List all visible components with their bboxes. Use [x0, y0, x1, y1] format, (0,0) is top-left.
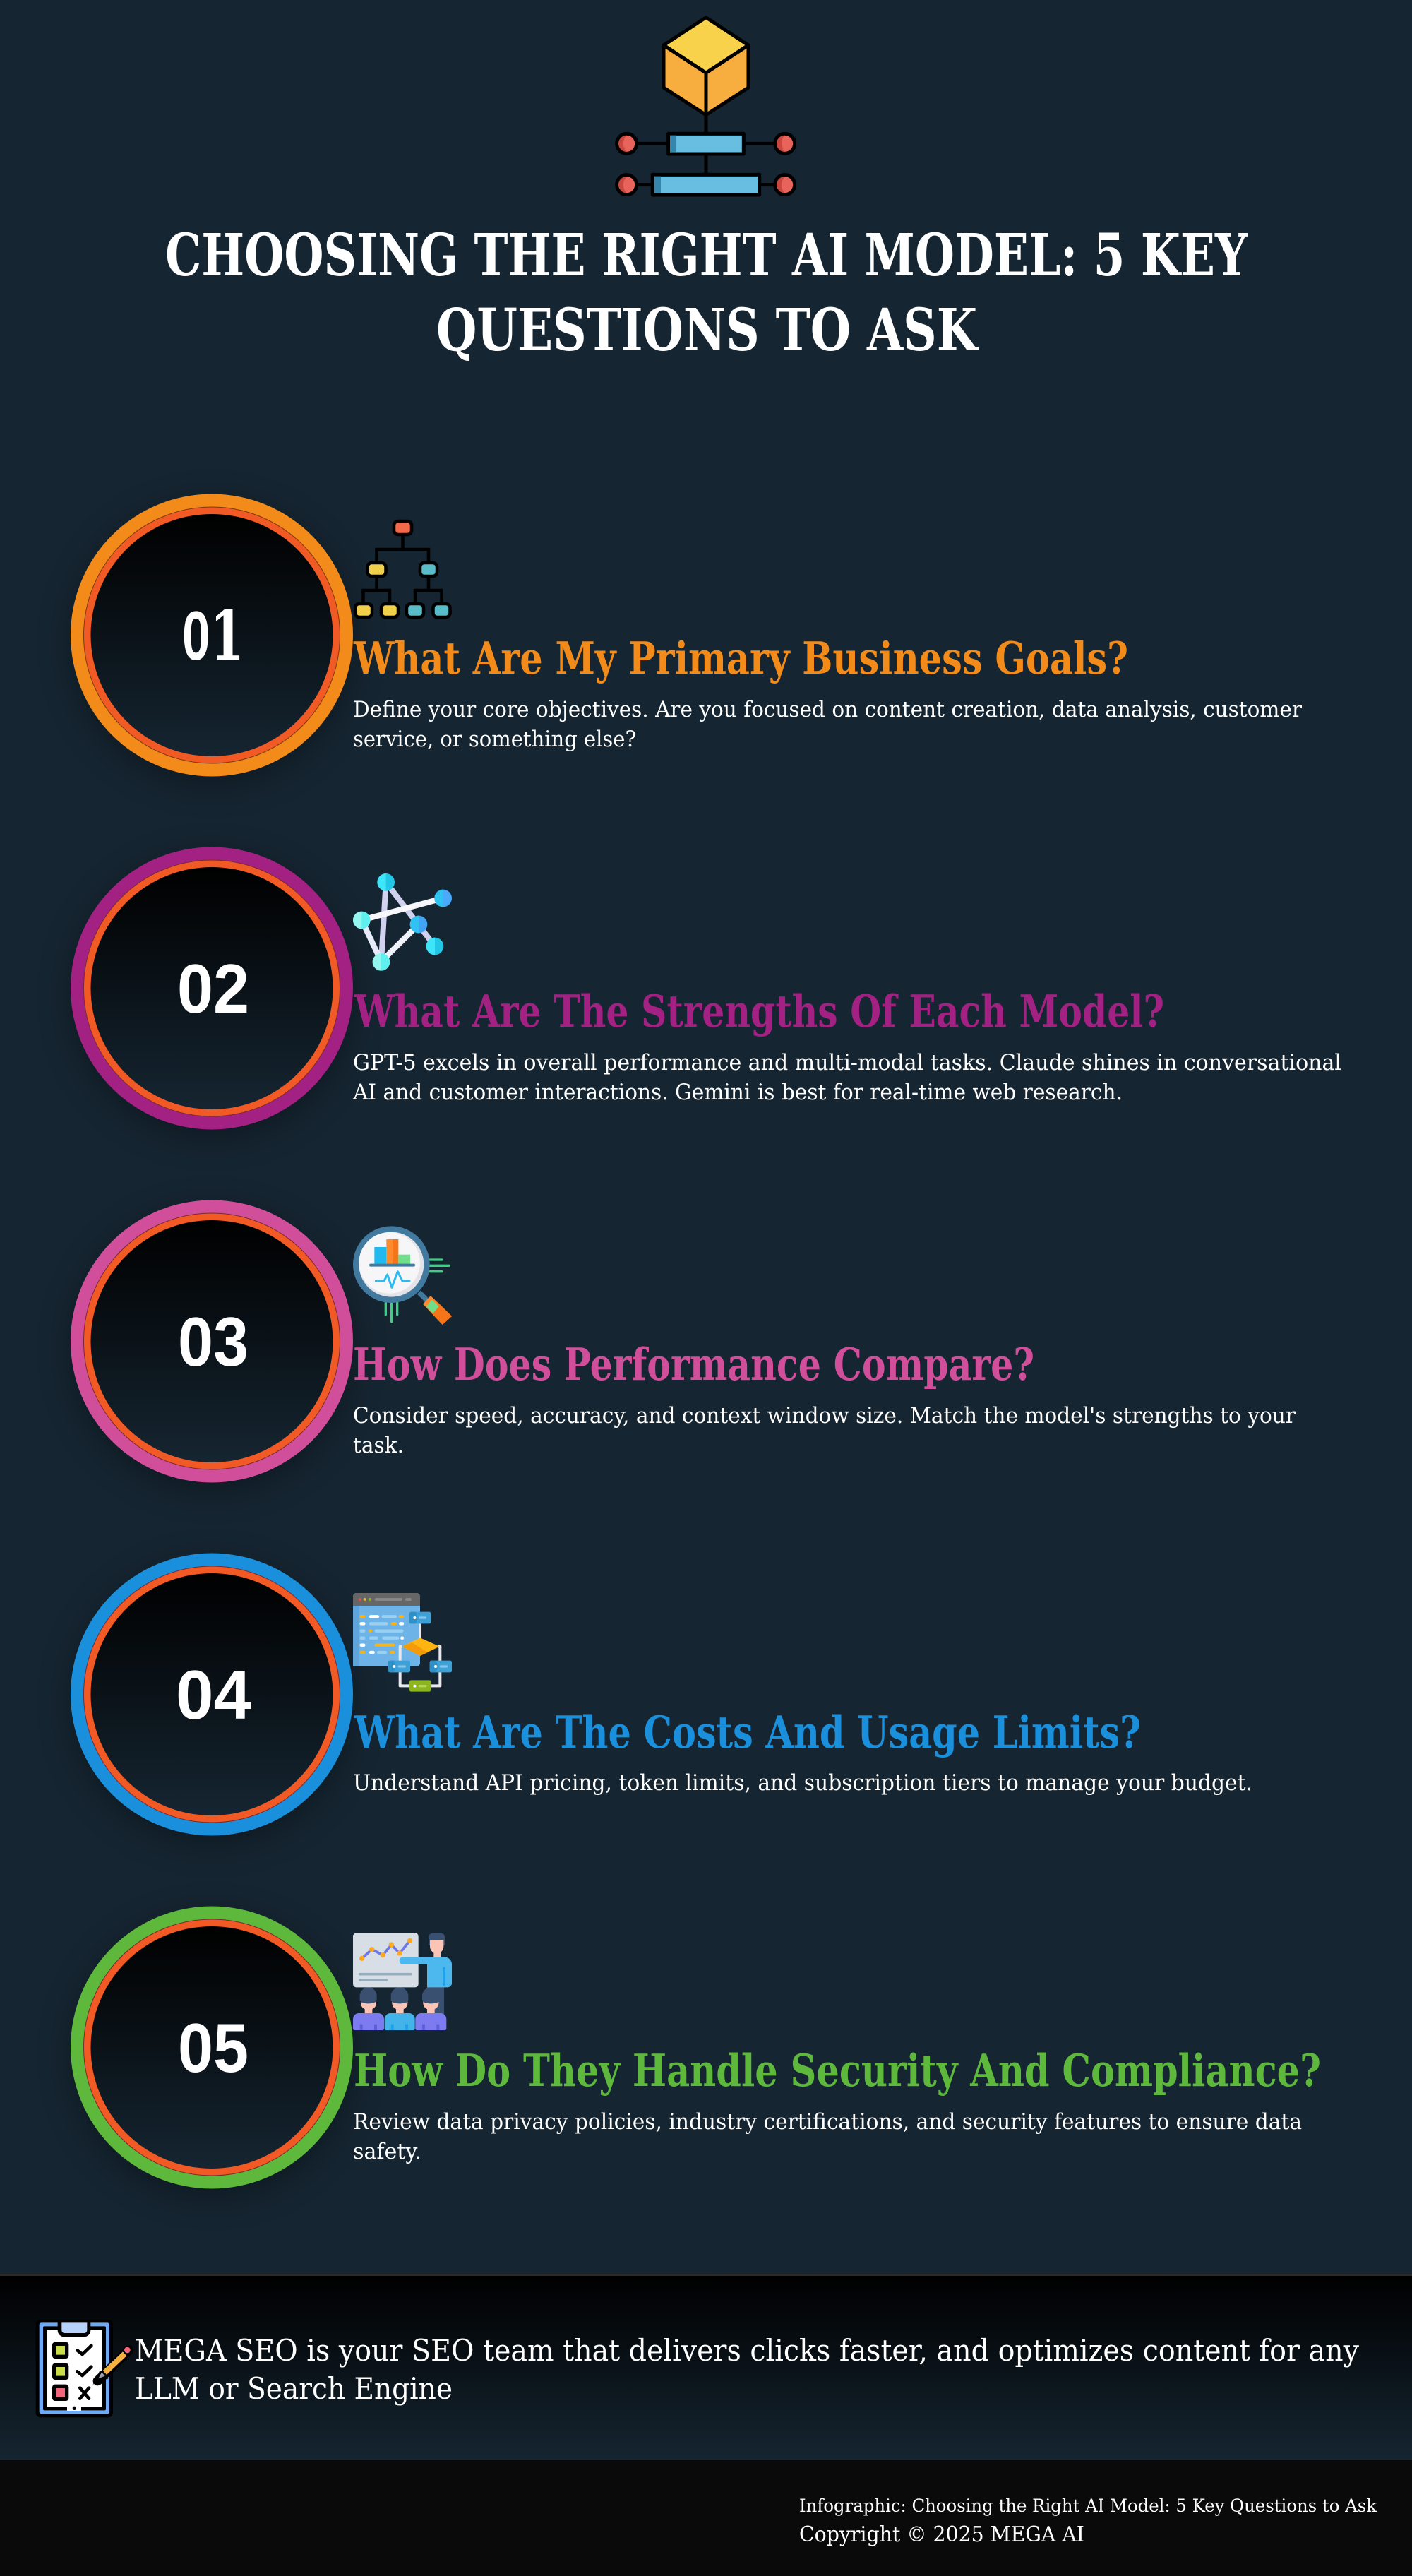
description — [353, 1403, 1296, 1458]
icon: clipboard checklist — [36, 2320, 131, 2417]
panel: question 2 — [71, 847, 1341, 1130]
number badge 04 — [71, 1554, 353, 1836]
title: QUESTIONS TO ASK — [436, 297, 979, 364]
heading: How Does Performance Compare? — [353, 1338, 1034, 1390]
title — [165, 222, 1248, 364]
number badge 03 — [71, 1200, 353, 1483]
number badge 05 — [71, 1907, 353, 2189]
description: task. — [353, 1433, 404, 1458]
icon: presenter and audience — [353, 1933, 452, 2030]
description: Understand API pricing, token limits, and subscription tiers to manage your budget. — [353, 1770, 1252, 1796]
icon: organisation tree — [355, 521, 450, 617]
icon: node network — [353, 873, 452, 971]
number badge 02: 02 — [177, 950, 249, 1027]
panel: question 4 — [71, 1554, 1252, 1836]
footer text — [799, 2496, 1377, 2547]
panel: question 5 — [71, 1907, 1321, 2189]
footer text: Infographic: Choosing the Right AI Model: 5 Key Questions to Ask — [799, 2496, 1377, 2516]
description — [353, 697, 1302, 752]
heading: What Are My Primary Business Goals? — [353, 632, 1128, 684]
description: AI and customer interactions. Gemini is best for real-time web research. — [352, 1080, 1123, 1105]
description: GPT-5 excels in overall performance and multi-modal tasks. Claude shines in conversational — [353, 1050, 1341, 1075]
panel: call to action band — [0, 2274, 1412, 2460]
footer text: Copyright © 2025 MEGA AI — [799, 2522, 1084, 2547]
description: Review data privacy policies, industry certifications, and security features to ensure data — [353, 2109, 1302, 2135]
heading: What Are The Costs And Usage Limits? — [354, 1706, 1141, 1758]
number badge 01: 01 — [182, 596, 244, 676]
call to action text — [135, 2333, 1359, 2406]
description — [353, 2109, 1302, 2164]
description: Consider speed, accuracy, and context window size. Match the model's strengths to your — [353, 1403, 1296, 1429]
icon: magnifier with chart — [353, 1226, 452, 1325]
icon: cube with network nodes — [617, 18, 795, 195]
panel: question 3 — [71, 1200, 1296, 1483]
description: safety. — [353, 2139, 421, 2164]
number badge 01 — [71, 494, 353, 777]
call to action text: MEGA SEO is your SEO team that delivers clicks faster, and optimizes content for any — [135, 2333, 1359, 2368]
description — [352, 1050, 1341, 1105]
panel: footer — [0, 2460, 1412, 2576]
number badge 04: 04 — [176, 1656, 251, 1734]
number badge 03: 03 — [178, 1303, 249, 1381]
description: service, or something else? — [353, 727, 636, 752]
number badge 05: 05 — [178, 2009, 249, 2087]
panel: question 1 — [71, 494, 1302, 777]
icon: code window and flowchart — [353, 1593, 452, 1692]
number badge 02 — [71, 847, 353, 1130]
heading: What Are The Strengths Of Each Model? — [354, 985, 1164, 1037]
description: Define your core objectives. Are you focused on content creation, data analysis, customer — [353, 697, 1302, 722]
call to action text: LLM or Search Engine — [135, 2371, 453, 2406]
